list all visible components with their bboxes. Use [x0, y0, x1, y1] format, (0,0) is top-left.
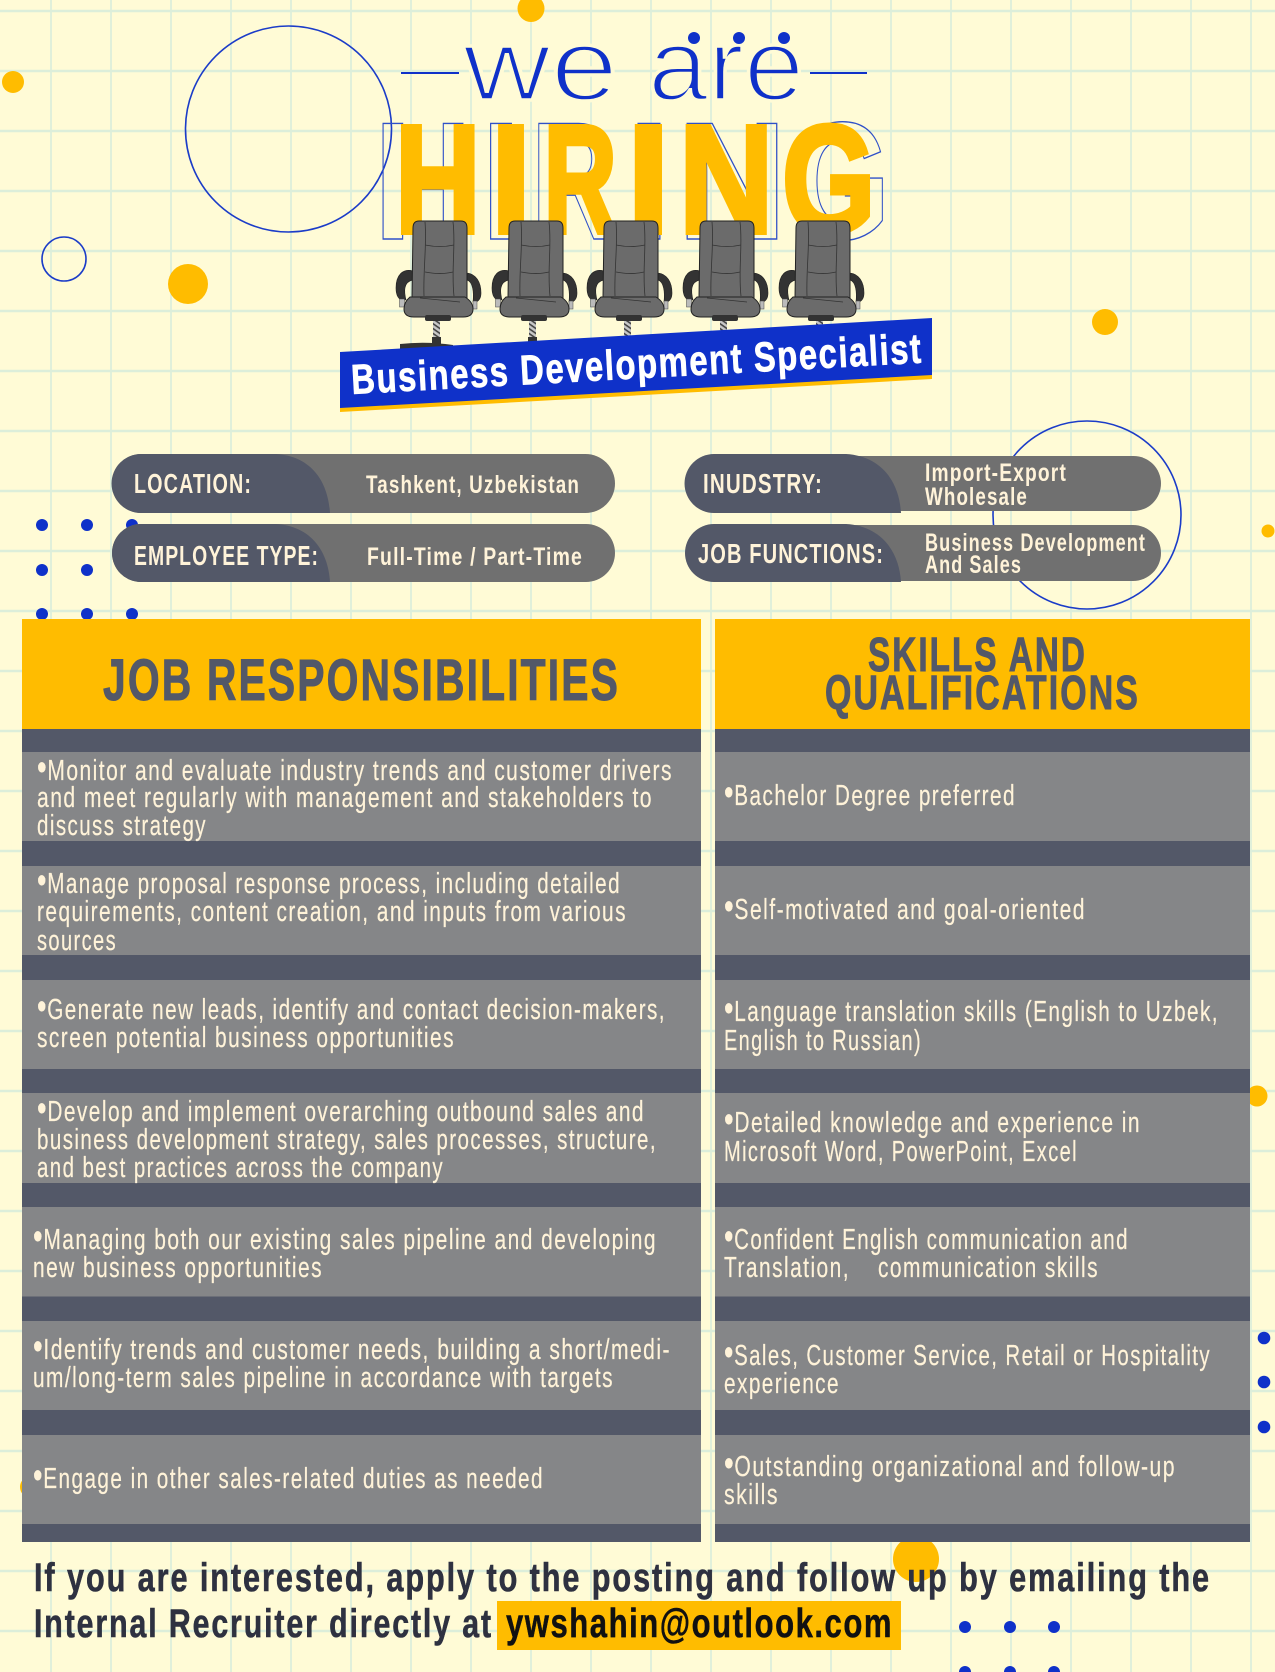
responsibility row 2 [22, 860, 701, 957]
responsibility row 7: •Engage in other sales-related duties as needed [33, 1455, 544, 1497]
responsibility row 7 [22, 1435, 701, 1524]
responsibility row 3 [22, 980, 701, 1069]
heading: HIRING outline layer: H [374, 87, 472, 275]
responsibility row 5: new business opportunities [33, 1252, 323, 1284]
heading: HIRING solid layer: R [544, 94, 617, 266]
decorative outline circles [42, 26, 1181, 609]
heading: HIRING outline layer: G [794, 87, 890, 275]
callout: email address: ywshahin@outlook.com [506, 1600, 893, 1646]
skill row 6: experience [724, 1368, 840, 1400]
skill row 3: English to Russian) [724, 1025, 922, 1057]
info pill: industry: Wholesale [925, 483, 1028, 511]
skill row 2: •Self-motivated and goal-oriented [724, 886, 1086, 928]
skill row 3 [715, 980, 1250, 1069]
responsibility row 4: and best practices across the company [37, 1152, 444, 1184]
skill row 5: Translation, [724, 1252, 850, 1284]
footer: call to action [34, 1556, 1211, 1650]
heading: we are: are [648, 8, 804, 122]
responsibility row 2: requirements, content creation, and inputs from various [37, 896, 627, 928]
responsibility row 1: discuss strategy [37, 810, 207, 842]
heading: we are: we [462, 8, 618, 122]
info pill: job functions [685, 524, 1161, 582]
heading: HIRING outline layer: R [531, 87, 615, 275]
responsibility row 1: and meet regularly with management and stakeholders to [37, 782, 653, 814]
heading: HIRING solid layer: N [679, 94, 774, 266]
panel: job responsibilities [22, 619, 701, 1542]
panel heading: skills and qualifications: SKILLS AND [868, 629, 1087, 682]
panel: skills and qualifications [715, 619, 1250, 1542]
skill row 6 [715, 1321, 1250, 1410]
heading: HIRING outline layer [374, 87, 890, 275]
responsibility row 1: •Monitor and evaluate industry trends and customer drivers [37, 747, 673, 789]
skill row 7 [715, 1435, 1250, 1524]
panel heading: job responsibilities [22, 619, 701, 729]
heading: we are [401, 8, 867, 122]
responsibility row 6: um/long-term sales pipeline in accordance with targets [33, 1362, 614, 1394]
heading: HIRING solid layer [395, 94, 876, 266]
skill row 5: communication skills [878, 1252, 1099, 1284]
icon: office chairs row [396, 221, 864, 352]
info pill: industry [685, 454, 1161, 513]
info pill: job functions: And Sales [925, 551, 1022, 579]
info pill: industry: Import-Export [925, 459, 1067, 487]
responsibility row 3: •Generate new leads, identify and contact decision-makers, [37, 986, 666, 1028]
info pill: location [112, 454, 615, 513]
responsibility row 6: •Identify trends and customer needs, building a short/medi- [33, 1326, 671, 1368]
panel heading: skills and qualifications [715, 619, 1250, 729]
skill row 7: skills [724, 1479, 779, 1511]
info pill: industry: INUDSTRY: [703, 468, 823, 499]
responsibility row 2: sources [37, 925, 117, 957]
heading: HIRING solid layer: I [627, 94, 670, 266]
responsibility row 1 [22, 747, 701, 842]
decorative blue dots [36, 519, 1270, 1672]
skill row 2 [715, 866, 1250, 955]
panel heading: job responsibilities: JOB RESPONSIBILITIES [103, 648, 620, 713]
info pill: employee type [112, 524, 615, 582]
heading: HIRING solid layer: G [782, 94, 876, 266]
info pill: location: Tashkent, Uzbekistan [366, 471, 580, 499]
skill row 5 [715, 1207, 1250, 1296]
banner: job title ribbon: Business Development Specialist [350, 325, 924, 403]
heading: HIRING solid layer: H [395, 94, 481, 266]
info pill: employee type: EMPLOYEE TYPE: [134, 540, 319, 571]
responsibility row 2: •Manage proposal response process, including detailed [37, 860, 621, 902]
skill row 4: Microsoft Word, PowerPoint, Excel [724, 1136, 1078, 1168]
responsibility row 3: screen potential business opportunities [37, 1022, 455, 1054]
info pill: location: LOCATION: [134, 468, 252, 499]
skill row 5: •Confident English communication and [724, 1216, 1129, 1258]
skill row 1: •Bachelor Degree preferred [724, 772, 1016, 814]
panel heading: skills and qualifications: QUALIFICATIONS [825, 667, 1140, 720]
responsibility row 6 [22, 1321, 701, 1410]
info pill: job functions: JOB FUNCTIONS: [698, 538, 884, 569]
info pill: employee type: Full-Time / Part-Time [367, 543, 583, 571]
heading: HIRING outline layer: I [628, 87, 670, 275]
heading: HIRING solid layer: I [491, 94, 531, 266]
footer: call to action: Internal Recruiter directly at [34, 1602, 493, 1646]
info pill: job functions: Business Development [925, 529, 1146, 557]
skill row 1 [715, 752, 1250, 841]
heading: HIRING outline layer: N [677, 87, 787, 275]
heading: HIRING outline layer: I [481, 87, 521, 275]
skill row 4 [715, 1093, 1250, 1183]
responsibility row 5 [22, 1207, 701, 1296]
responsibility row 4: business development strategy, sales processes, structure, [37, 1124, 657, 1156]
responsibility row 4 [22, 1088, 701, 1184]
responsibility row 5: •Managing both our existing sales pipeline and developing [33, 1216, 657, 1258]
responsibility row 4: •Develop and implement overarching outbound sales and [37, 1088, 645, 1130]
